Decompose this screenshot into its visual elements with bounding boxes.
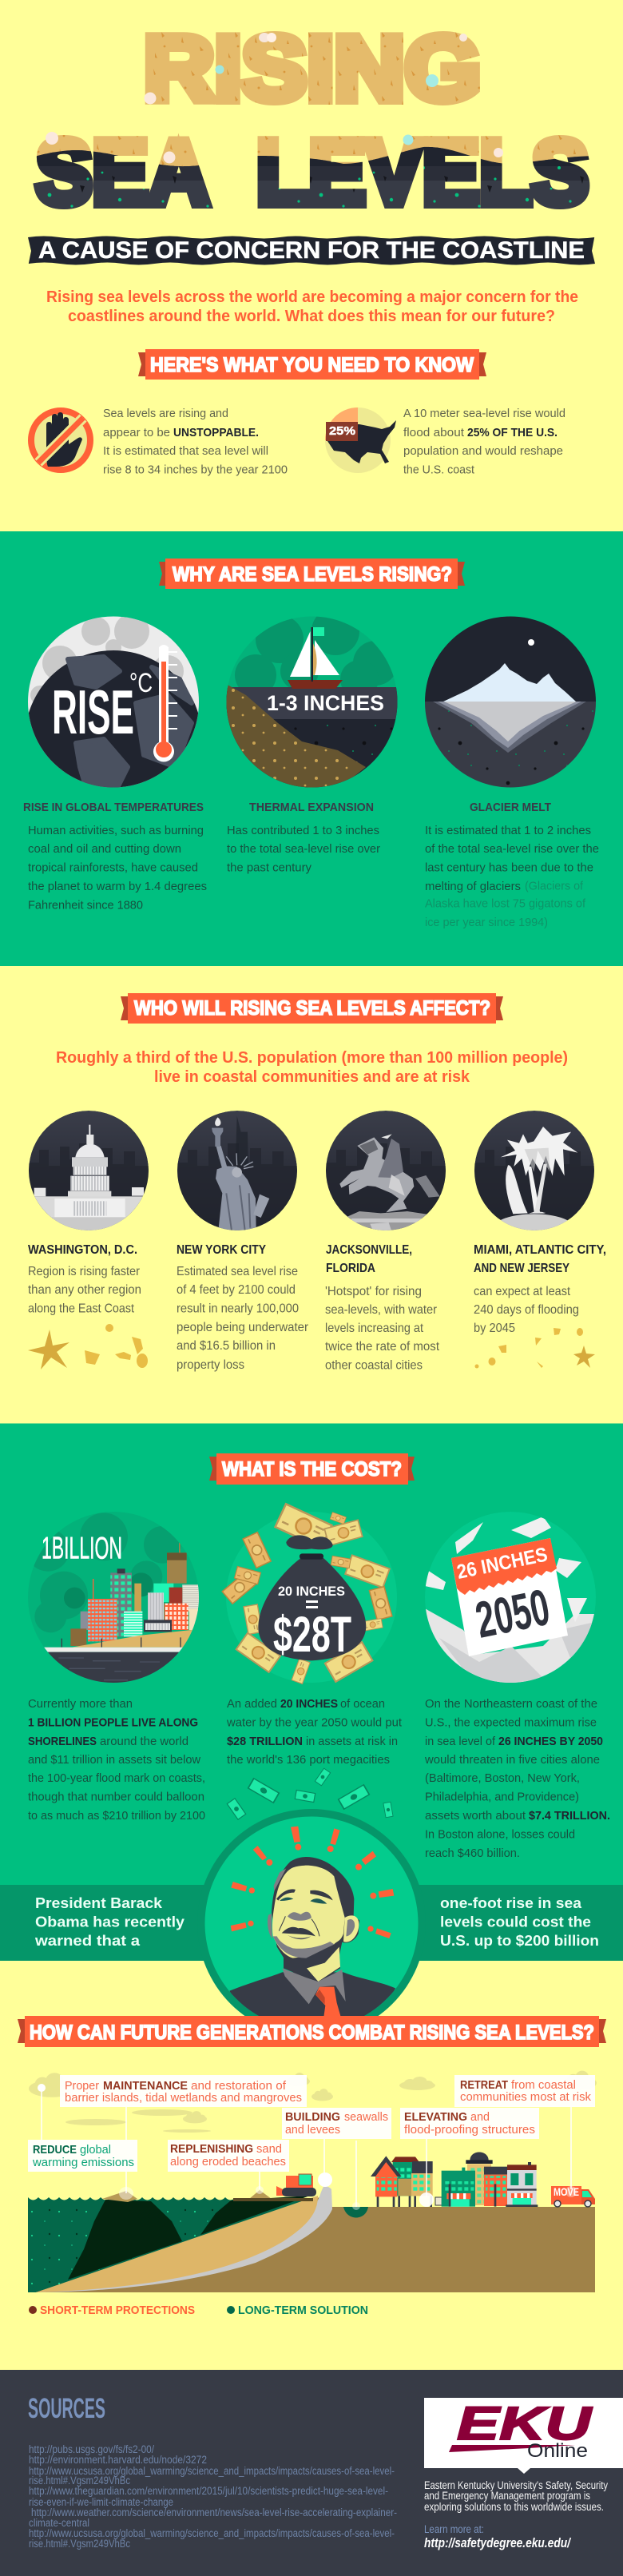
text: 26 inches by 2050: Philadelphia, and Providence)	[425, 1791, 579, 1804]
text: 26 inches by 2050: (Baltimore, Boston, New York,	[425, 1771, 580, 1785]
clouds	[29, 2071, 597, 2133]
icon: calendar 26 inches 2050	[425, 1512, 596, 1683]
sand beach	[36, 2196, 318, 2292]
heading and text: thermal expansion: Has contributed 1 to 3 inches	[227, 824, 379, 837]
text: 26 inches by 2050: reach $460 billion.	[425, 1847, 520, 1860]
text: Jacksonville Florida	[325, 1243, 440, 1373]
icon: money bag 28 trillion: $28T	[273, 1607, 351, 1663]
icon: money bag 28 trillion	[222, 1504, 397, 1684]
text: 25 percent of US: the U.S. coast	[403, 463, 475, 476]
text: unstoppable: Sea levels are rising and	[103, 407, 228, 420]
heading and text: thermal expansion: to the total sea-level rise over	[227, 842, 380, 856]
heading: sources: SOURCES	[28, 2393, 105, 2424]
legend: short-term and long-term: SHORT-TERM PROTECTIONS	[40, 2304, 195, 2317]
icon: calendar 26 inches 2050: 26 INCHES	[455, 1544, 550, 1584]
icon: statue of liberty	[177, 1111, 297, 1230]
intro text	[46, 288, 578, 325]
subheading: a third of US population: Roughly a third of the U.S. population (more than 100 million people)	[56, 1049, 568, 1067]
text: Miami Atlantic City New Jersey	[474, 1243, 606, 1335]
text: Washington DC	[28, 1243, 141, 1315]
title line: Sea Levels, sand part: SEA	[36, 122, 209, 224]
text: Washington DC: Region is rising faster	[28, 1265, 141, 1278]
icon: money bag 28 trillion: 20 INCHES	[278, 1584, 345, 1599]
text: New York City	[177, 1243, 309, 1372]
connector lines and markers	[38, 2084, 577, 2210]
text: one billion people: to as much as $210 trillion by 2100	[28, 1809, 205, 1823]
text: 25 percent of US: population and would reshape	[403, 444, 563, 458]
text: New York City: NEW YORK CITY	[177, 1243, 266, 1257]
callout: maintenance: and restoration of	[191, 2079, 287, 2093]
heading and text: thermal expansion: the past century	[227, 861, 312, 875]
text: Jacksonville Florida: 'Hotspot' for rising	[325, 1285, 422, 1298]
callout: building: seawalls	[344, 2110, 388, 2124]
text: 20 inches of ocean water: An added	[227, 1697, 277, 1711]
water surface scallops	[28, 2197, 234, 2202]
source links: climate-central	[29, 2517, 89, 2529]
text: one billion people	[28, 1697, 205, 1823]
ground	[331, 2207, 595, 2292]
callout: elevating: flood-proofing structures	[404, 2123, 535, 2137]
heading and text: rise in global temperatures: coal and oil and cutting down	[28, 842, 181, 856]
text: New York City: property loss	[177, 1358, 244, 1372]
banner: what is the cost: WHAT IS THE COST?	[222, 1458, 402, 1481]
title line: Sea Levels, water part: LEVELS	[256, 122, 589, 224]
text: one billion people: and $11 trillion in assets sit below	[28, 1753, 200, 1767]
title: Rising Sea Levels	[33, 31, 589, 209]
title line: Sea Levels, water part	[33, 147, 589, 209]
callout: replenishing: along eroded beaches	[170, 2155, 286, 2169]
text: EKU statement	[424, 2479, 608, 2513]
text: one billion people: the 100-year flood mark on coasts,	[28, 1771, 205, 1785]
heading and text: rise in global temperatures: RISE IN GLOBAL TEMPERATURES	[23, 801, 204, 814]
text: Jacksonville Florida: other coastal cities	[325, 1358, 423, 1373]
heading and text: glacier melt: GLACIER MELT	[470, 801, 551, 814]
icon: global temperature rise	[28, 617, 199, 788]
legend: short-term and long-term	[29, 2304, 368, 2317]
banner: why are sea levels rising: WHY ARE SEA LEVELS RISING?	[173, 563, 452, 586]
icon: global temperature rise: RISE	[52, 677, 134, 747]
title line: Sea Levels, sand part: LEVELS	[256, 122, 589, 224]
icon: coastal city one billion: 1BILLION	[42, 1532, 122, 1566]
text: Obama quote left: President Barack	[35, 1895, 163, 1911]
panel: why are sea levels rising	[0, 531, 623, 966]
deep trenches	[68, 2196, 310, 2280]
callout: elevating: and	[470, 2110, 490, 2124]
callout: reduce: warming emissions	[32, 2156, 134, 2169]
text: Miami Atlantic City New Jersey: can expect at least	[474, 1285, 570, 1298]
callout: reduce: global	[80, 2143, 111, 2157]
town buildings	[371, 2152, 538, 2207]
text: 26 inches by 2050: 26 INCHES BY 2050	[498, 1735, 603, 1748]
text: Miami Atlantic City New Jersey: by 2045	[474, 1322, 515, 1335]
heading and text: glacier melt: (Glaciers of	[525, 880, 584, 893]
title line: Sea Levels, sand part	[36, 122, 589, 224]
icon: falling money	[227, 1768, 393, 1819]
text: one billion people: Currently more than	[28, 1697, 133, 1711]
text: New York City: result in nearly 100,000	[177, 1302, 299, 1315]
text: New York City: of 4 feet by 2100 could	[177, 1283, 296, 1297]
text: 26 inches by 2050: U.S., the expected maximum rise	[425, 1716, 597, 1729]
text: 26 inches by 2050: assets worth about	[425, 1809, 526, 1823]
text: 26 inches by 2050: On the Northeastern coast of the	[425, 1697, 597, 1711]
text: unstoppable	[103, 407, 288, 476]
source links: http://www.weather.com/science/environment/news/sea-level-rise-accelerating-explainer-	[31, 2506, 397, 2518]
banner: how can future generations combat rising sea levels	[18, 2016, 606, 2047]
text: Obama quote right: levels could cost the	[440, 1914, 591, 1930]
text: Obama quote right	[440, 1895, 599, 1949]
text: 20 inches of ocean water: $28 TRILLION	[227, 1735, 303, 1748]
heading and text: glacier melt: Alaska have lost 75 gigatons of	[425, 897, 586, 911]
banner: what is the cost	[209, 1453, 415, 1485]
banner: why are sea levels rising	[159, 559, 465, 589]
icon: US capitol	[29, 1111, 152, 1233]
text: Washington DC: WASHINGTON, D.C.	[28, 1243, 137, 1257]
heading and text: glacier melt: of the total sea-level rise over the	[425, 842, 599, 856]
banner: here's what you need to know	[138, 349, 486, 380]
text: unstoppable: It is estimated that sea level will	[103, 444, 268, 458]
text: New York City: people being underwater	[177, 1321, 309, 1334]
icon: glacier melt	[423, 616, 597, 788]
text: Washington DC: than any other region	[28, 1283, 141, 1297]
icon: calendar 26 inches 2050: 2050	[470, 1578, 554, 1649]
heading and text: thermal expansion: THERMAL EXPANSION	[249, 801, 374, 814]
text: unstoppable: UNSTOPPABLE.	[173, 426, 259, 439]
text: 25 percent of US: A 10 meter sea-level rise would	[403, 407, 565, 420]
text: Miami Atlantic City New Jersey: MIAMI, ATLANTIC CITY,	[474, 1243, 606, 1257]
text: one billion people: 1 BILLION PEOPLE LIVE ALONG	[28, 1716, 198, 1729]
callout: reduce: REDUCE	[33, 2143, 77, 2157]
callout: building	[282, 2108, 391, 2139]
callout: retreat: from coastal	[511, 2078, 576, 2092]
text: 26 inches by 2050	[424, 1697, 610, 1860]
text: Obama quote right: U.S. up to $200 billion	[440, 1933, 599, 1949]
callout: retreat: RETREAT	[460, 2078, 508, 2092]
shells on the title letters	[46, 33, 503, 163]
ocean water	[28, 2201, 318, 2292]
callout: replenishing: sand	[256, 2142, 282, 2156]
diagram: coastal solutions cross-section	[28, 2071, 597, 2292]
logo: EKU Online: Online	[527, 2440, 588, 2462]
text: unstoppable: appear to be	[103, 426, 170, 439]
callout: replenishing	[168, 2140, 289, 2172]
icon: sailboat thermal expansion: 1-3 INCHES	[267, 691, 384, 715]
text: 26 inches by 2050: In Boston alone, losses could	[425, 1828, 575, 1842]
text: Obama quote right: one-foot rise in sea	[440, 1895, 582, 1911]
text: Jacksonville Florida: FLORIDA	[326, 1262, 375, 1275]
heading and text: glacier melt: It is estimated that 1 to 2 inches	[425, 824, 591, 837]
text: 20 inches of ocean water: of ocean	[340, 1697, 385, 1711]
text: EKU statement: and Emergency Management program is	[424, 2490, 590, 2502]
text: unstoppable: rise 8 to 34 inches by the year 2100	[103, 463, 288, 476]
icon: stop hand	[31, 411, 90, 470]
source links: http://pubs.usgs.gov/fs/fs2-00/	[29, 2443, 154, 2455]
text: learn more link	[424, 2523, 572, 2550]
text: Miami Atlantic City New Jersey: 240 days of flooding	[474, 1303, 579, 1317]
text: Washington DC: along the East Coast	[28, 1302, 134, 1315]
intro text: coastlines around the world. What does this mean for our future?	[68, 308, 555, 325]
heading and text: glacier melt: ice per year since 1994)	[425, 916, 548, 929]
text: Obama quote left: Obama has recently	[35, 1914, 185, 1930]
text: 26 inches by 2050: would threaten in five cities alone	[424, 1753, 600, 1767]
text: Jacksonville Florida: sea-levels, with water	[325, 1303, 438, 1317]
heading and text: rise in global temperatures: the planet to warm by 1.4 degrees	[28, 880, 207, 893]
text: 20 inches of ocean water: in assets at risk in	[306, 1735, 398, 1748]
band: Obama quote background	[0, 1885, 623, 1961]
heading and text: thermal expansion	[227, 801, 380, 875]
source links: rise-even-if-we-limit-climate-change	[29, 2496, 173, 2508]
banner: who will rising sea levels affect: WHO WILL RISING SEA LEVELS AFFECT?	[134, 997, 490, 1020]
text: Jacksonville Florida: JACKSONVILLE,	[326, 1243, 412, 1257]
banner: who will rising sea levels affect	[121, 993, 503, 1024]
text: 26 inches by 2050: in sea level of	[425, 1735, 496, 1748]
text: 25 percent of US: 25% OF THE U.S.	[467, 426, 558, 439]
text: 20 inches of ocean water: 20 INCHES	[280, 1697, 338, 1711]
callout: replenishing: REPLENISHING	[170, 2142, 253, 2156]
source links: rise.html#.Vgsm249VhBc	[29, 2475, 130, 2487]
source links	[29, 2443, 397, 2550]
text: 25 percent of US	[403, 407, 565, 476]
icon: 25 percent US map: 25%	[329, 424, 355, 438]
panel: footer	[0, 2370, 623, 2576]
text: 20 inches of ocean water: the world's 136 port megacities	[227, 1753, 390, 1767]
text: one billion people: SHORELINES	[28, 1735, 97, 1748]
callout: building: and levees	[285, 2123, 340, 2137]
source links: http://www.theguardian.com/environment/2015/jul/10/scientists-predict-huge-sea-level-	[29, 2485, 388, 2497]
text: learn more link: Learn more at:	[424, 2523, 484, 2535]
callout: maintenance: barrier islands, tidal wetlands and mangroves	[65, 2091, 302, 2105]
icon: Jackson statue	[326, 1111, 446, 1232]
callout: retreat: communities most at risk	[460, 2090, 591, 2104]
callout: maintenance: Proper	[65, 2079, 99, 2093]
callout: building: BUILDING	[285, 2110, 340, 2124]
moving van: MOVE	[554, 2185, 579, 2198]
heading and text: rise in global temperatures: tropical rainforests, have caused	[28, 861, 198, 875]
island mounds	[102, 2190, 313, 2202]
text: 20 inches of ocean water: water by the year 2050 would put	[226, 1716, 403, 1729]
heading and text: glacier melt: melting of glaciers	[425, 880, 521, 893]
source links: rise.html#.Vgsm249VhBc	[29, 2538, 130, 2550]
portrait: Barack Obama with exclamation marks	[204, 1809, 419, 2016]
water speckle	[28, 2201, 318, 2292]
source links: http://www.ucsusa.org/global_warming/science_and_impacts/impacts/causes-of-sea-level-	[29, 2527, 395, 2539]
text: Obama quote left: warned that a	[34, 1933, 141, 1949]
heading and text: rise in global temperatures	[23, 801, 207, 912]
source links: http://www.ucsusa.org/global_warming/science_and_impacts/impacts/causes-of-sea-level-	[29, 2465, 395, 2477]
callout: elevating: ELEVATING	[404, 2110, 467, 2124]
panel: what is the cost	[0, 1424, 623, 1961]
subtitle ribbon: A CAUSE OF CONCERN FOR THE COASTLINE	[38, 237, 585, 264]
bulldozer	[276, 2174, 316, 2196]
intro text: Rising sea levels across the world are becoming a major concern for the	[46, 288, 578, 306]
text: learn more link: http://safetydegree.eku.edu/	[424, 2535, 572, 2550]
legend: short-term and long-term: LONG-TERM SOLUTION	[238, 2304, 368, 2317]
text: one billion people: around the world	[100, 1735, 188, 1748]
icon: starfish and shells left	[28, 1324, 148, 1369]
heading and text: rise in global temperatures: Fahrenheit since 1880	[28, 898, 143, 912]
callout: elevating	[400, 2108, 539, 2139]
title line: Rising: RISING	[144, 18, 481, 120]
icon: starfish and shells right	[474, 1328, 595, 1368]
callout: maintenance: MAINTENANCE	[103, 2079, 188, 2093]
icon: global temperature rise: °C	[129, 668, 153, 698]
text: 25 percent of US: flood about	[403, 426, 465, 439]
exclamation marks	[231, 1827, 394, 1938]
text: New York City: and $16.5 billion in	[177, 1339, 276, 1353]
moving van	[551, 2185, 595, 2207]
text: one billion people: though that number could balloon	[28, 1791, 204, 1804]
text: Miami Atlantic City New Jersey: AND NEW JERSEY	[474, 1262, 569, 1275]
text: New York City: Estimated sea level rise	[177, 1265, 298, 1278]
text: 26 inches by 2050: $7.4 TRILLION.	[529, 1809, 610, 1823]
text: Obama quote left	[34, 1895, 185, 1949]
icon: sailboat thermal expansion	[226, 607, 398, 791]
title line: Sea Levels, water part: SEA	[36, 122, 209, 224]
icon: palm trees and surfboard	[474, 1111, 594, 1242]
banner: here's what you need to know: HERE'S WHAT YOU NEED TO KNOW	[150, 354, 474, 376]
logo: EKU Online	[424, 2398, 623, 2474]
source links: http://environment.harvard.edu/node/3272	[29, 2454, 207, 2466]
icon: 25 percent US map	[325, 407, 396, 473]
callout: retreat	[454, 2075, 595, 2107]
icon: coastal city one billion	[26, 1512, 201, 1689]
seawall	[36, 2186, 332, 2292]
text: Jacksonville Florida: levels increasing at	[325, 1322, 423, 1335]
logo: EKU Online: EKU	[457, 2398, 593, 2450]
text: 20 inches of ocean water	[226, 1697, 403, 1767]
heading and text: rise in global temperatures: Human activities, such as burning	[28, 824, 204, 837]
pond	[343, 2207, 368, 2218]
subheading: a third of US population	[56, 1049, 568, 1086]
heading and text: glacier melt	[425, 801, 599, 929]
callout: maintenance	[60, 2075, 307, 2107]
text: Jacksonville Florida: twice the rate of most	[325, 1340, 440, 1354]
callout: reduce	[28, 2140, 137, 2172]
subheading: a third of US population: live in coastal communities and are at risk	[154, 1068, 470, 1086]
heading and text: glacier melt: last century has been due to the	[425, 861, 593, 875]
